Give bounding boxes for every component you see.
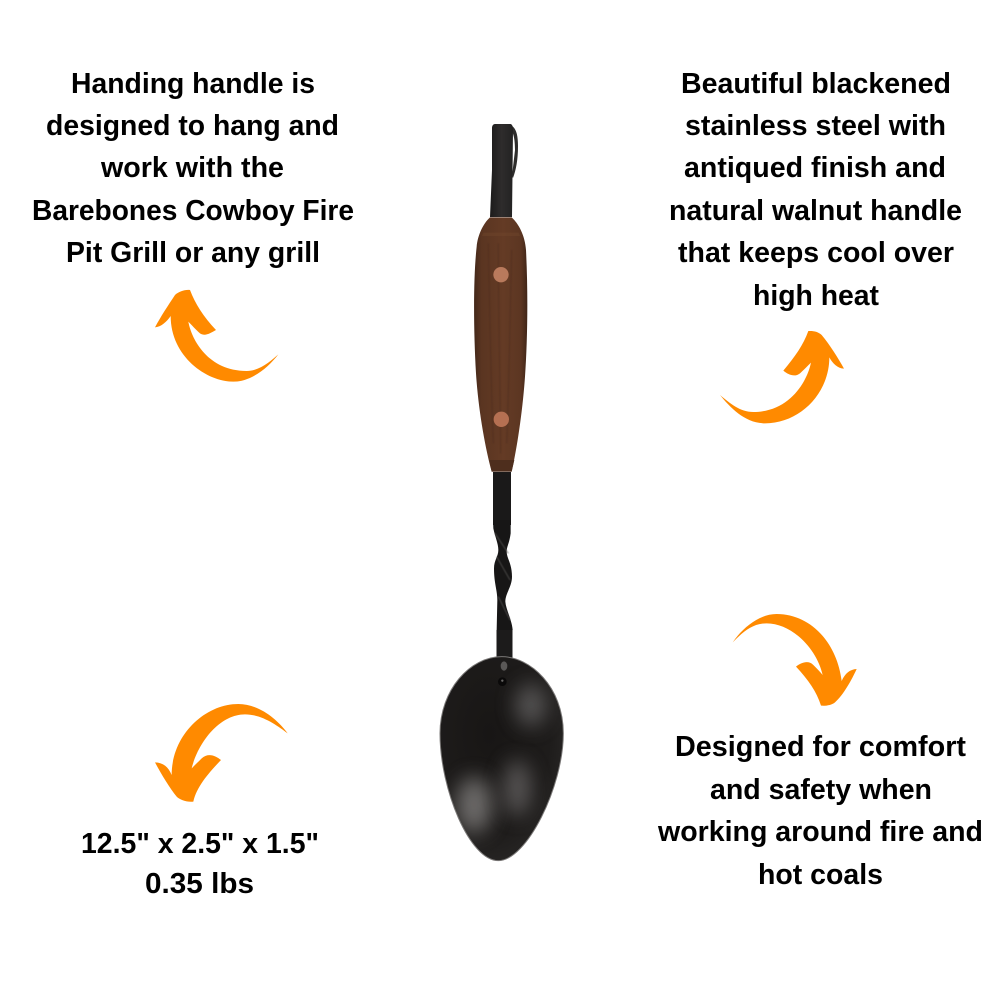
text: blackened stainless steel: stainless steel with — [685, 110, 946, 142]
text: blackened stainless steel: high heat — [753, 280, 879, 312]
text: hanging handle: Pit Grill or any grill — [66, 237, 320, 269]
text: blackened stainless steel: natural walnut handle — [669, 195, 962, 227]
text: comfort and safety: and safety when — [710, 774, 932, 806]
twisted stem — [493, 520, 513, 630]
text: dimensions and weight: 0.35 lbs — [145, 868, 254, 900]
hanging hook — [490, 124, 518, 217]
arrow: top left pointing up to handle — [155, 290, 278, 382]
text: hanging handle: work with the — [100, 152, 284, 184]
text: blackened stainless steel: antiqued finish and — [684, 152, 946, 184]
arrow: bottom left pointing down — [155, 704, 288, 802]
copper rivet top — [493, 267, 509, 282]
text: hanging handle — [32, 68, 354, 269]
text: comfort and safety — [657, 731, 983, 891]
text: blackened stainless steel — [669, 68, 962, 312]
arrow: bottom right pointing down — [733, 614, 857, 706]
text: dimensions and weight — [81, 828, 319, 900]
arrow: top right pointing up to handle — [720, 331, 844, 423]
bowl rivets — [498, 661, 507, 686]
text: dimensions and weight: 12.5" x 2.5" x 1.5" — [81, 828, 319, 860]
text: blackened stainless steel: that keeps cool over — [678, 237, 954, 269]
text: comfort and safety: working around fire and — [657, 816, 983, 848]
text: blackened stainless steel: Beautiful blackened — [681, 68, 951, 100]
spoon bowl — [440, 657, 563, 861]
spoon product image — [440, 124, 563, 861]
straight shank above twist — [493, 472, 511, 525]
text: hanging handle: Barebones Cowboy Fire — [32, 195, 354, 227]
text: comfort and safety: hot coals — [758, 859, 883, 891]
text: hanging handle: designed to hang and — [46, 110, 339, 142]
walnut handle — [474, 217, 527, 472]
text: comfort and safety: Designed for comfort — [675, 731, 966, 763]
copper rivet bottom — [494, 412, 509, 427]
text: hanging handle: Handing handle is — [71, 68, 315, 100]
lower shank — [496, 630, 512, 660]
